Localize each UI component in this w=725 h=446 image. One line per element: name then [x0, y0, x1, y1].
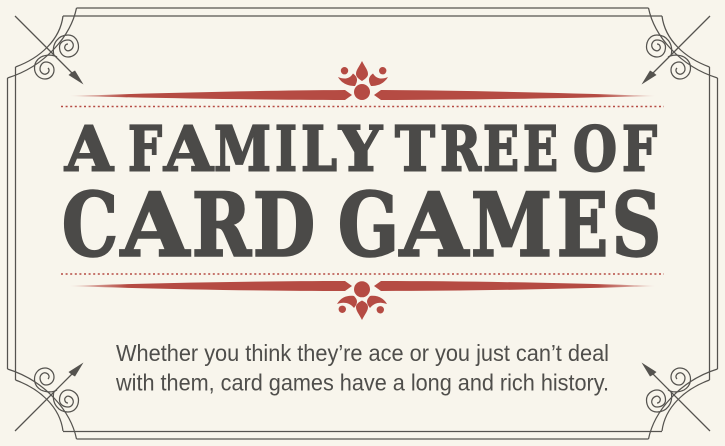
title line 2: R: [192, 174, 252, 276]
title line 2: [62, 174, 661, 276]
title line 1: E: [483, 112, 519, 186]
title line 1: L: [301, 112, 337, 186]
title line 1: Y: [338, 112, 383, 186]
title line 1: F: [128, 112, 162, 186]
title line 2: A: [120, 174, 190, 276]
title line 1: A: [64, 112, 114, 186]
title line 1: O: [573, 112, 617, 186]
title line 1: [64, 112, 657, 186]
corner ornament: bottom right: [642, 362, 718, 439]
top flourish: [70, 61, 655, 100]
title line 2: G: [338, 174, 399, 276]
title line 2: S: [612, 174, 661, 276]
subtitle: [115, 340, 609, 396]
bottom dotted rule: [61, 273, 664, 275]
subtitle line 1: Whether you think they’re ace or you just can’t deal: [116, 340, 609, 366]
title line 2: D: [253, 174, 315, 276]
title line 1: M: [214, 112, 271, 186]
title line 2: C: [62, 174, 118, 276]
title line 1: I: [275, 112, 297, 186]
title line 1: E: [523, 112, 558, 186]
corner ornament: top left: [8, 8, 84, 84]
title line 2: A: [399, 174, 469, 276]
corner ornament: top right: [642, 8, 718, 84]
title line 1: T: [395, 112, 435, 186]
title line 1: A: [163, 112, 214, 186]
subtitle line 2: with them, card games have a long and rich history.: [115, 370, 609, 396]
title: [62, 112, 661, 276]
title line 1: F: [622, 112, 657, 186]
title line 2: E: [557, 174, 608, 276]
title line 1: R: [440, 112, 481, 186]
corner ornament: bottom left: [8, 362, 84, 439]
bottom flourish: [70, 281, 655, 320]
top dotted rule: [61, 106, 664, 108]
title line 2: M: [471, 174, 552, 276]
